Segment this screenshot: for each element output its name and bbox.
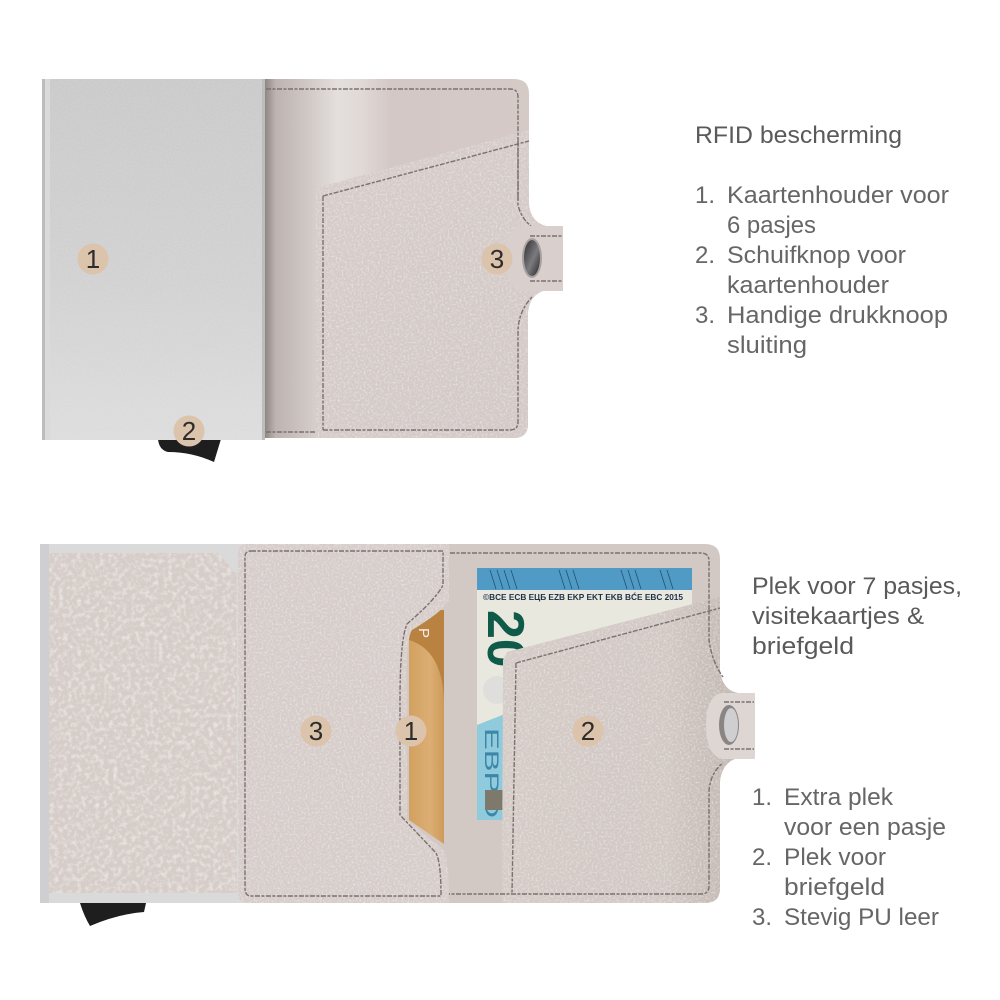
aluminium back plate	[40, 544, 250, 903]
feature list: top wallet: Schuifknop voor	[727, 242, 906, 269]
heading: Plek voor 7 pasjes: visitekaartjes &	[752, 603, 924, 630]
feature list: top wallet: Handige drukknoop	[727, 302, 948, 329]
feature list: bottom wallet: Extra plek	[784, 784, 894, 811]
marker 2 bottom	[572, 716, 604, 746]
marker 3 bottom	[300, 716, 332, 746]
heading: RFID bescherming: RFID bescherming	[695, 122, 902, 149]
gold bank card	[409, 610, 444, 844]
bottom wallet: open view	[40, 544, 755, 926]
stitching middle panel	[245, 551, 443, 896]
feature list: bottom wallet: 3.	[752, 904, 772, 931]
stitching top wallet	[266, 89, 533, 432]
feature list: top wallet: 1.	[695, 182, 715, 209]
feature list: top wallet	[695, 182, 949, 359]
gold bank card: P	[415, 628, 432, 638]
feature list: top wallet: 2.	[695, 242, 715, 269]
snap button closure	[505, 226, 563, 291]
left edge strip	[40, 544, 49, 903]
feature list: bottom wallet: briefgeld	[784, 874, 885, 901]
marker 1 top	[78, 244, 108, 274]
marker 2 bottom: 2	[581, 716, 595, 746]
marker 2 top: 2	[182, 416, 196, 446]
euro banknote: ЕВРО	[480, 728, 501, 818]
marker 3 bottom: 3	[309, 716, 323, 746]
slider tab: black bottom	[80, 903, 146, 926]
euro banknote	[476, 568, 692, 820]
top wallet: closed card holder view	[42, 79, 563, 462]
euro banknote: ©BCE ECB ЕЦБ EZB EKP EKT EKB BĆE EBC 2015	[483, 591, 683, 602]
aluminium card case	[42, 79, 265, 440]
feature list: bottom wallet: voor een pasje	[784, 814, 946, 841]
marker 2 top	[174, 416, 204, 446]
heading: Plek voor 7 pasjes	[752, 573, 962, 660]
marker 1 bottom: 1	[404, 716, 418, 746]
leather inner panel coarse grain	[49, 553, 237, 893]
marker 3 top	[482, 244, 512, 274]
numbered markers: bottom wallet	[300, 716, 604, 746]
slider tab: black	[158, 439, 221, 462]
right back panel lining	[400, 544, 720, 903]
feature list: top wallet: 3.	[695, 302, 715, 329]
left middle leather panel	[238, 544, 449, 903]
bottom snap button	[706, 693, 755, 759]
stitching right panel	[445, 553, 723, 894]
feature list: top wallet: kaartenhouder	[727, 272, 889, 299]
leather inner lining	[262, 79, 563, 438]
feature list: top wallet: 6 pasjes	[727, 212, 816, 239]
feature list: top wallet: sluiting	[727, 332, 807, 359]
marker 3 top: 3	[490, 244, 504, 274]
feature list: bottom wallet: Stevig PU leer	[784, 904, 939, 931]
feature list: bottom wallet: 1.	[752, 784, 772, 811]
leather pocket	[316, 130, 563, 438]
feature list: bottom wallet	[752, 784, 946, 931]
heading: Plek voor 7 pasjes: briefgeld	[752, 633, 854, 660]
feature list: bottom wallet: Plek voor	[784, 844, 886, 871]
feature list: top wallet: Kaartenhouder voor	[727, 182, 949, 209]
marker 1 top: 1	[86, 244, 100, 274]
numbered markers: top wallet	[78, 244, 512, 446]
right front pocket	[502, 597, 755, 903]
marker 1 bottom	[396, 716, 426, 746]
heading: Plek voor 7 pasjes: Plek voor 7 pasjes,	[752, 573, 962, 600]
feature list: bottom wallet: 2.	[752, 844, 772, 871]
large value 20 rotated: 20	[476, 610, 534, 668]
